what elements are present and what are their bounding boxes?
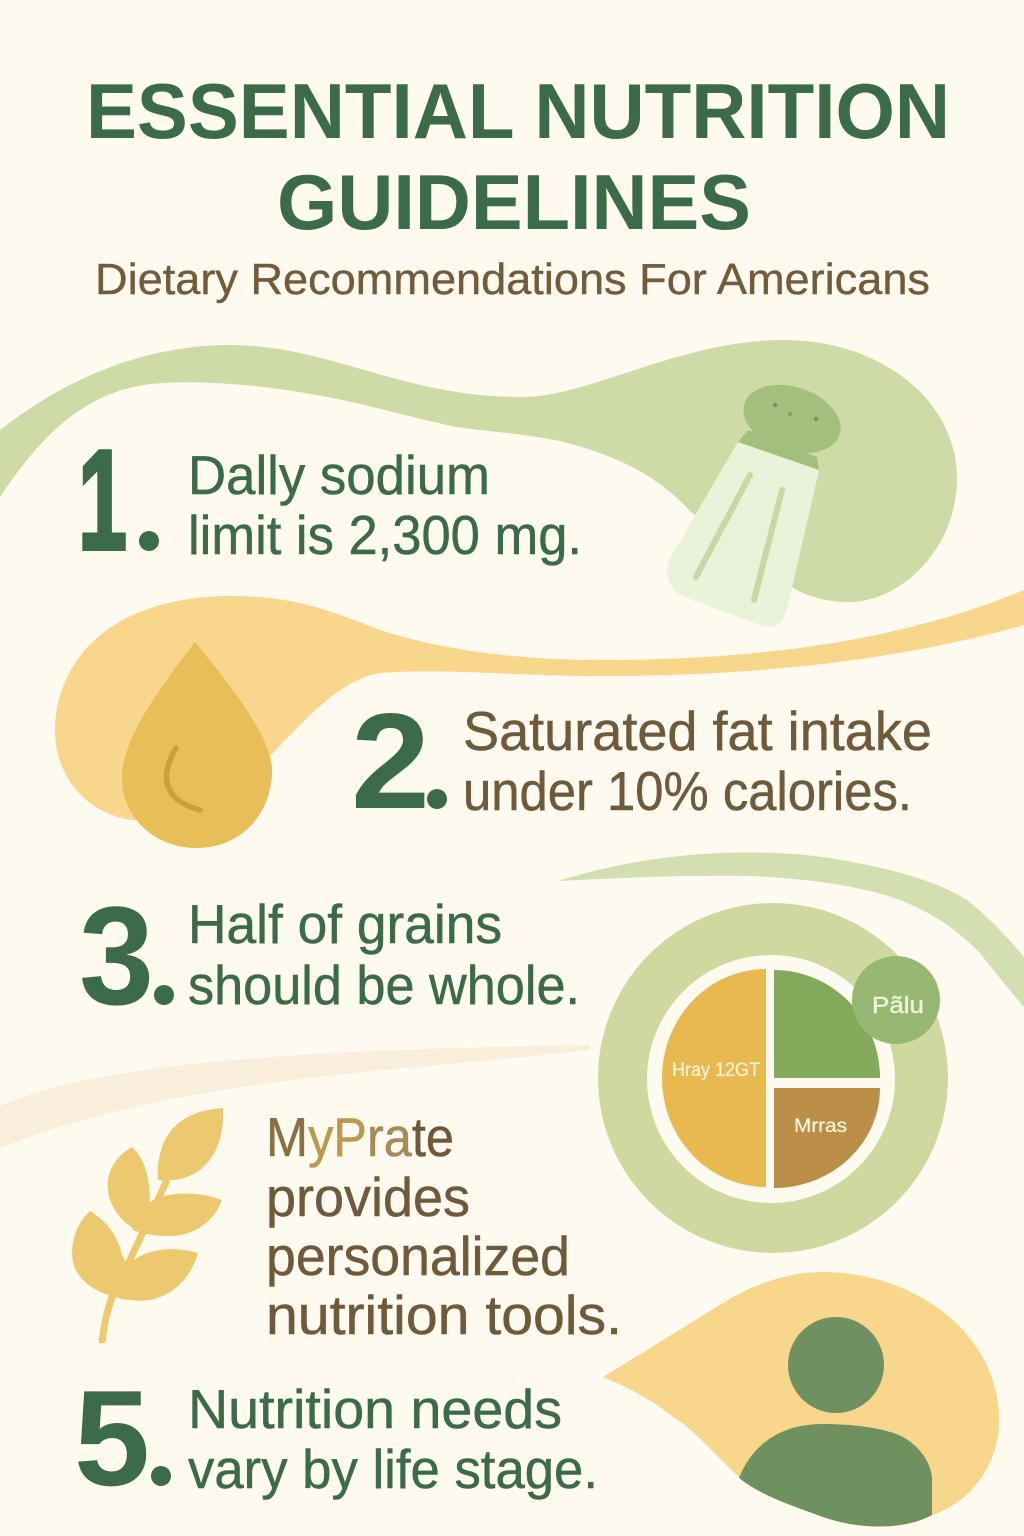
text: life stage: Nutrition needs [188, 1378, 562, 1440]
text: sodium limit: limit is 2,300 mg. [188, 504, 582, 566]
text: MyPlate tools: MyPrate [266, 1106, 454, 1168]
text: whole grains [188, 893, 580, 1016]
chart: MyPlate plate [598, 903, 948, 1253]
panel: sodium background swoosh [0, 340, 957, 602]
icon: oil drop [122, 642, 272, 848]
plate section: grains [662, 969, 766, 1187]
text: sodium limit: Dally sodium [188, 444, 490, 506]
text: life stage [188, 1378, 598, 1500]
icon: wheat sprig [72, 1108, 223, 1343]
beige swoosh [0, 1045, 590, 1148]
text: sodium limit [188, 444, 582, 566]
text: life stage: vary by life stage. [188, 1438, 598, 1500]
title [86, 67, 950, 246]
text: MyPlate tools: nutrition tools. [266, 1284, 622, 1346]
text: saturated fat: Saturated fat intake [463, 700, 932, 762]
title: ESSENTIAL NUTRITION [86, 67, 950, 155]
text: saturated fat: under 10% calories. [463, 760, 912, 822]
text: saturated fat [463, 700, 932, 822]
plate label: protein: Mrras [794, 1116, 847, 1137]
plate badge [852, 956, 940, 1044]
plate badge label: Pãlu [872, 992, 924, 1018]
subtitle: Dietary Recommendations For Americans [95, 255, 930, 304]
number 1: 1 [78, 421, 127, 580]
icon: person [739, 1317, 932, 1527]
text: MyPlate tools: provides [266, 1166, 470, 1228]
plate section: vegetables [774, 970, 880, 1078]
number 2: 2 [351, 685, 430, 837]
text: MyPlate tools: personalized [266, 1225, 570, 1287]
title: GUIDELINES [277, 158, 751, 246]
text: whole grains: Half of grains [188, 893, 502, 955]
panel: saturated fat background swoosh [55, 590, 1024, 821]
plate section: protein [774, 1088, 880, 1188]
icon: salt shaker [667, 373, 849, 627]
text: whole grains: should be whole. [188, 954, 580, 1016]
plate label: grains: Hray 12GT [672, 1060, 760, 1081]
text: MyPlate tools [266, 1106, 622, 1346]
panel: life stage speech bubble [603, 1272, 999, 1527]
number 3: 3 [79, 877, 154, 1034]
top-right green swoosh [558, 852, 1024, 1007]
number 5: 5 [74, 1362, 150, 1514]
